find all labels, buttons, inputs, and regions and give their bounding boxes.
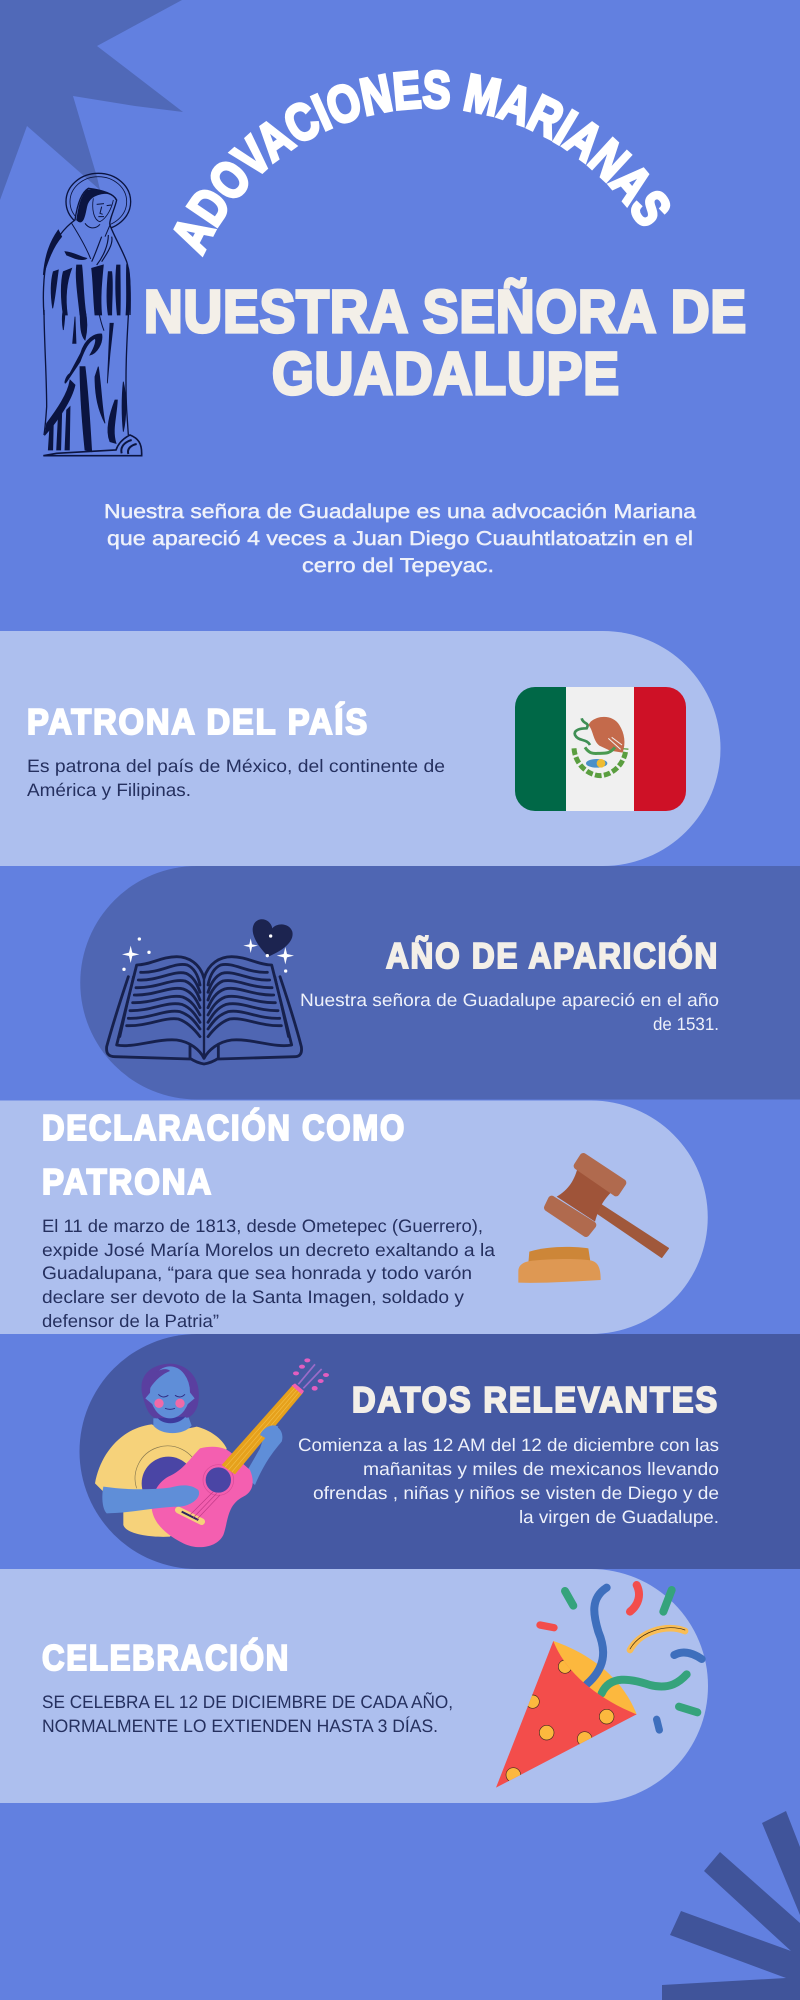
decorative rays bottom right (662, 1811, 800, 2000)
body text: Es patrona del país de México, del continente de (27, 756, 445, 776)
main title (144, 278, 747, 407)
icon: open book with heart and sparkles (107, 919, 302, 1064)
panel: año de aparición (80, 866, 800, 1100)
panel background (0, 631, 720, 866)
body text: expide José María Morelos un decreto exaltando a la (42, 1240, 496, 1260)
body text: declare ser devoto de la Santa Imagen, soldado y (42, 1287, 464, 1307)
heading: PATRONA DEL PAÍS (27, 701, 369, 742)
body text: SE CELEBRA EL 12 DE DICIEMBRE DE CADA AÑO, (42, 1692, 453, 1712)
heading: DATOS RELEVANTES (352, 1379, 719, 1420)
icon: gavel (518, 1157, 668, 1283)
icon: sparkles (122, 934, 294, 973)
body text: defensor de la Patria” (42, 1311, 219, 1331)
heading: AÑO DE APARICIÓN (386, 935, 719, 976)
panel: celebración (0, 1569, 708, 1803)
body text: ofrendas , niñas y niños se visten de Diego y de (313, 1483, 719, 1503)
icon: Mexican flag (515, 687, 686, 811)
body text (42, 1692, 453, 1736)
body text: Guadalupana, “para que sea honrada y todo varón (42, 1263, 472, 1283)
heading: CELEBRACIÓN (42, 1637, 290, 1678)
panel background (0, 1100, 708, 1334)
body text: de 1531. (653, 1014, 719, 1034)
intro text (104, 501, 697, 577)
body text: América y Filipinas. (27, 780, 191, 800)
icon: heart (253, 919, 293, 957)
intro text: que apareció 4 veces a Juan Diego Cuauhtlatoatzin en el (107, 528, 693, 550)
panel: declaración como patrona (0, 1100, 708, 1334)
body text: la virgen de Guadalupe. (519, 1507, 719, 1527)
body text: NORMALMENTE LO EXTIENDEN HASTA 3 DÍAS. (42, 1716, 438, 1736)
body text: Comienza a las 12 AM del 12 de diciembre con las (298, 1435, 719, 1455)
intro text: cerro del Tepeyac. (302, 555, 494, 577)
body text (298, 1435, 719, 1527)
body text: El 11 de marzo de 1813, desde Ometepec (Guerrero), (42, 1216, 483, 1236)
body text (27, 756, 445, 800)
panel background (80, 866, 800, 1100)
body text: mañanitas y miles de mexicanos llevando (363, 1459, 719, 1479)
body text (42, 1216, 496, 1331)
panel: datos relevantes (79, 1334, 800, 1569)
icon: Virgin Mary illustration (43, 173, 142, 456)
panel background (0, 1569, 708, 1803)
main title: GUADALUPE (272, 340, 620, 407)
body text: Nuestra señora de Guadalupe apareció en el año (300, 990, 719, 1010)
heading (42, 1107, 406, 1202)
icon: party popper (496, 1585, 702, 1788)
arched title: ADOVACIONES MARIANAS (173, 70, 670, 258)
heading: DECLARACIÓN COMO (42, 1107, 406, 1148)
main title: NUESTRA SEÑORA DE (144, 278, 747, 345)
heading: PATRONA (42, 1161, 213, 1202)
decorative star top left (0, 0, 183, 200)
panel background (79, 1334, 800, 1569)
body text (300, 990, 719, 1034)
icon: person playing guitar (95, 1358, 329, 1547)
panel: patrona del país (0, 631, 720, 866)
intro text: Nuestra señora de Guadalupe es una advocación Mariana (104, 501, 697, 523)
